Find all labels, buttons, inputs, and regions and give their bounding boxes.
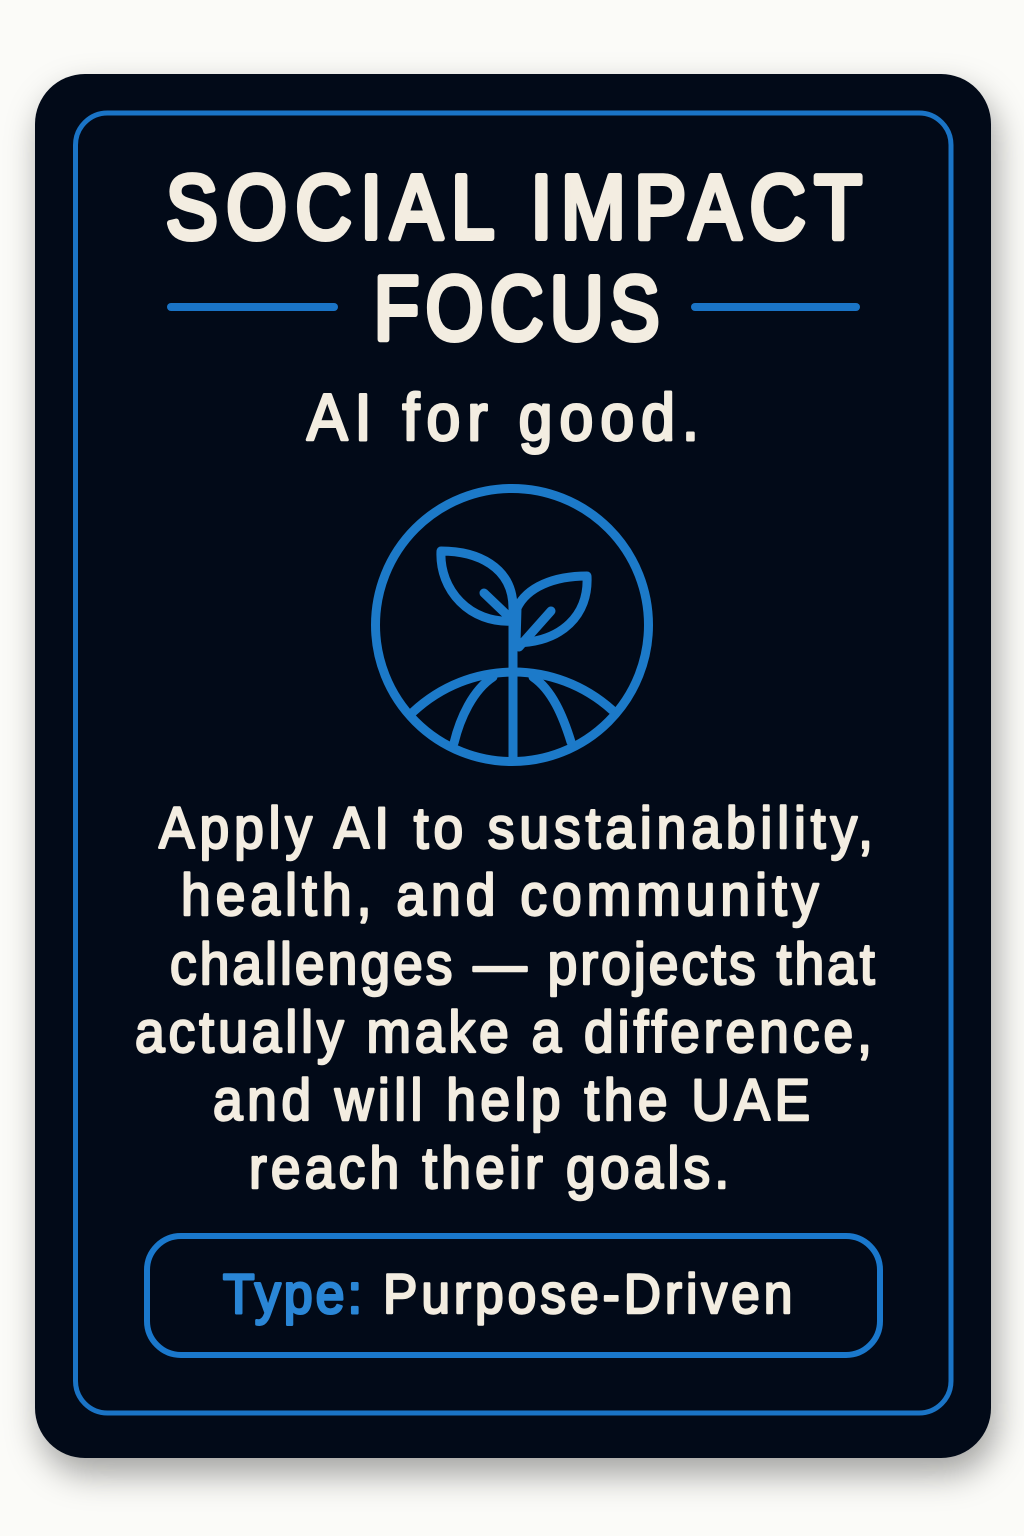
body text: Apply AI to sustainability, — [159, 796, 873, 860]
title: FOCUS — [374, 259, 659, 359]
icon: sprout on globe — [376, 488, 648, 762]
body text: health, and community — [181, 863, 819, 927]
body text: and will help the UAE — [213, 1068, 810, 1132]
title: SOCIAL IMPACT — [166, 157, 862, 257]
inner border — [76, 113, 951, 1413]
title — [166, 157, 862, 359]
type label: Type: — [223, 1263, 362, 1325]
title rule right — [691, 303, 860, 311]
subtitle: AI for good. — [307, 382, 699, 455]
title rule left — [167, 303, 338, 311]
body text — [135, 796, 875, 1200]
body text: actually make a difference, — [135, 1000, 872, 1064]
body text: reach their goals. — [249, 1136, 729, 1200]
type value: Purpose-Driven — [383, 1263, 792, 1325]
type badge — [147, 1236, 880, 1355]
body text: challenges — projects that — [170, 932, 875, 996]
